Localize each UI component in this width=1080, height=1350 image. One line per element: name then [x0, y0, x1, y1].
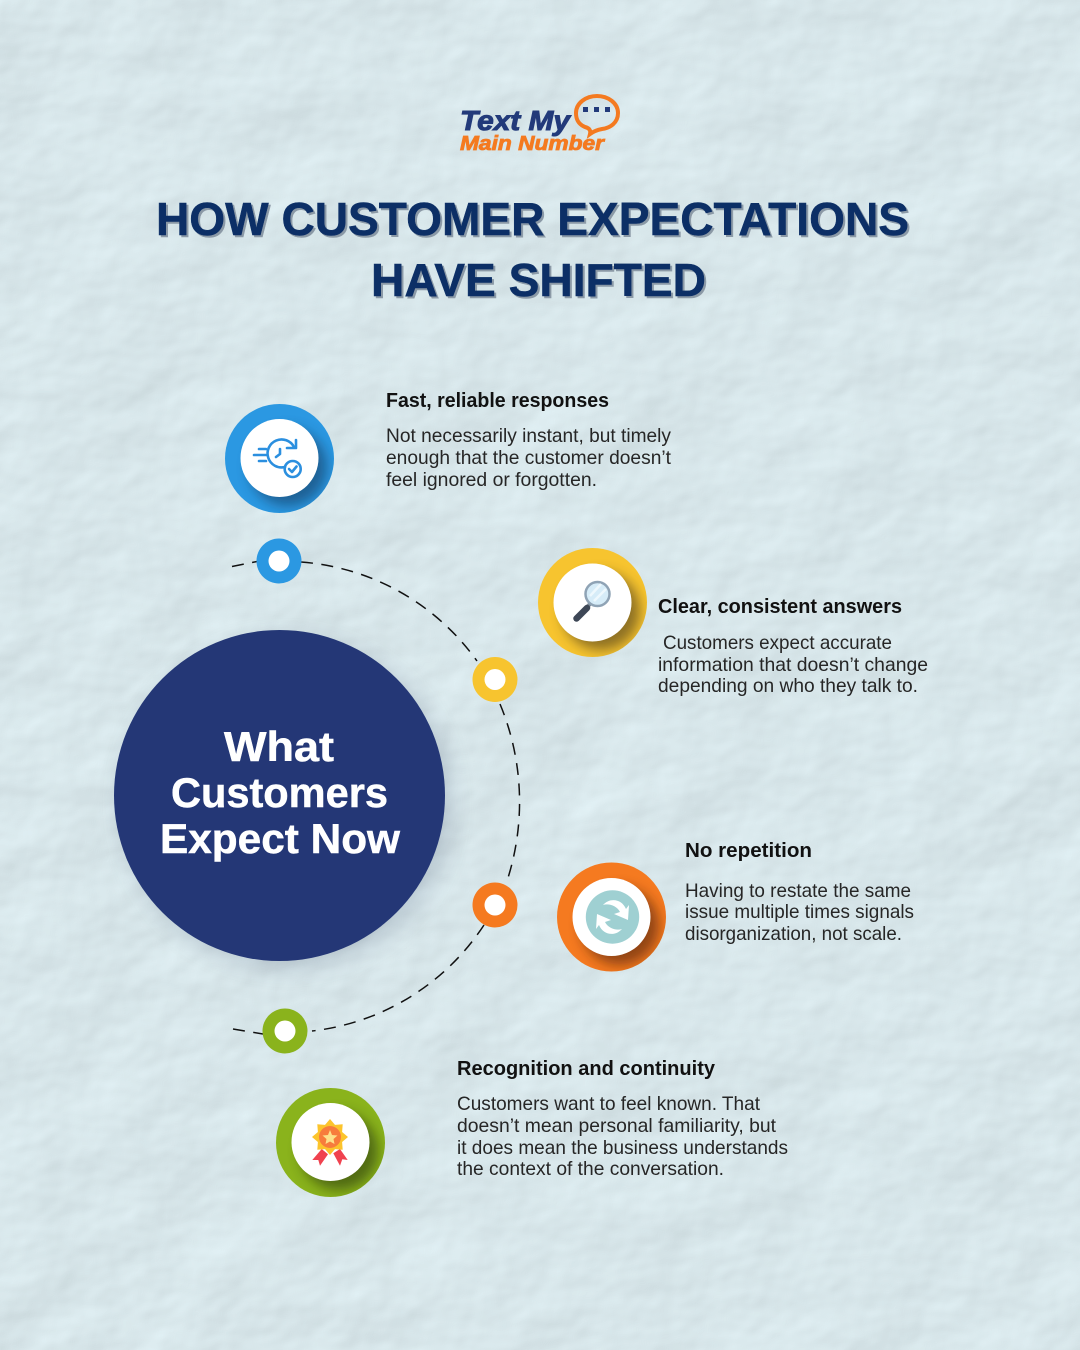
text: Clear, consistent answers: Clear, consistent answers [658, 596, 902, 618]
text: Fast, reliable responses: Fast, reliable responses [386, 390, 609, 412]
text: Recognition and continuity: Recognition and continuity [457, 1058, 716, 1080]
text: No repetition: Having to restate the same [685, 880, 911, 902]
icon: orange refresh badge [557, 862, 666, 972]
title: HOW CUSTOMER EXPECTATIONS [156, 193, 909, 245]
text: Clear, consistent answers: Customers expect accurate [663, 632, 892, 654]
center circle: What Customers Expect Now: Customers [171, 769, 388, 816]
text: Recognition and continuity: doesn’t mean personal familiarity, but [457, 1115, 777, 1137]
text: No repetition: issue multiple times signals [685, 901, 914, 923]
icon: yellow magnifier badge [538, 548, 647, 657]
text: Fast, reliable responses [386, 390, 672, 491]
center circle: What Customers Expect Now [114, 630, 452, 968]
icon: chat bubble [576, 96, 618, 134]
text: Recognition and continuity: it does mean the business understands [457, 1137, 788, 1159]
text: Clear, consistent answers: depending on who they talk to. [658, 675, 918, 697]
text: Recognition and continuity: Customers want to feel known. That [457, 1093, 761, 1115]
text: No repetition: No repetition [685, 840, 812, 862]
timeline dot: yellow [472, 657, 518, 702]
text: Clear, consistent answers [658, 596, 928, 697]
text: Fast, reliable responses: Not necessarily instant, but timely [386, 425, 671, 447]
icon: blue clock badge [225, 404, 334, 513]
title: HAVE SHIFTED [371, 254, 706, 306]
text: Recognition and continuity: the context of the conversation. [457, 1158, 724, 1180]
text: No repetition [685, 840, 914, 945]
logo: Text My Main Number [460, 96, 618, 155]
timeline dot: green [262, 1008, 308, 1054]
text: Fast, reliable responses: feel ignored or forgotten. [386, 469, 597, 491]
logo: Text My Main Number: Main Number [460, 133, 605, 155]
text: No repetition: disorganization, not scale. [685, 923, 902, 945]
dashed connector arc [232, 562, 520, 1034]
center circle: What Customers Expect Now: Expect Now [160, 815, 400, 862]
text: Clear, consistent answers: information that doesn’t change [658, 654, 928, 676]
text: Recognition and continuity [457, 1058, 788, 1180]
title [156, 193, 909, 306]
timeline dot: orange [472, 882, 518, 928]
center circle: What Customers Expect Now: What [224, 723, 334, 770]
text: Fast, reliable responses: enough that the customer doesn’t [386, 447, 672, 469]
icon: green award badge [276, 1088, 385, 1197]
logo: Text My Main Number: Text My [460, 105, 572, 136]
timeline dot: blue [256, 538, 302, 584]
